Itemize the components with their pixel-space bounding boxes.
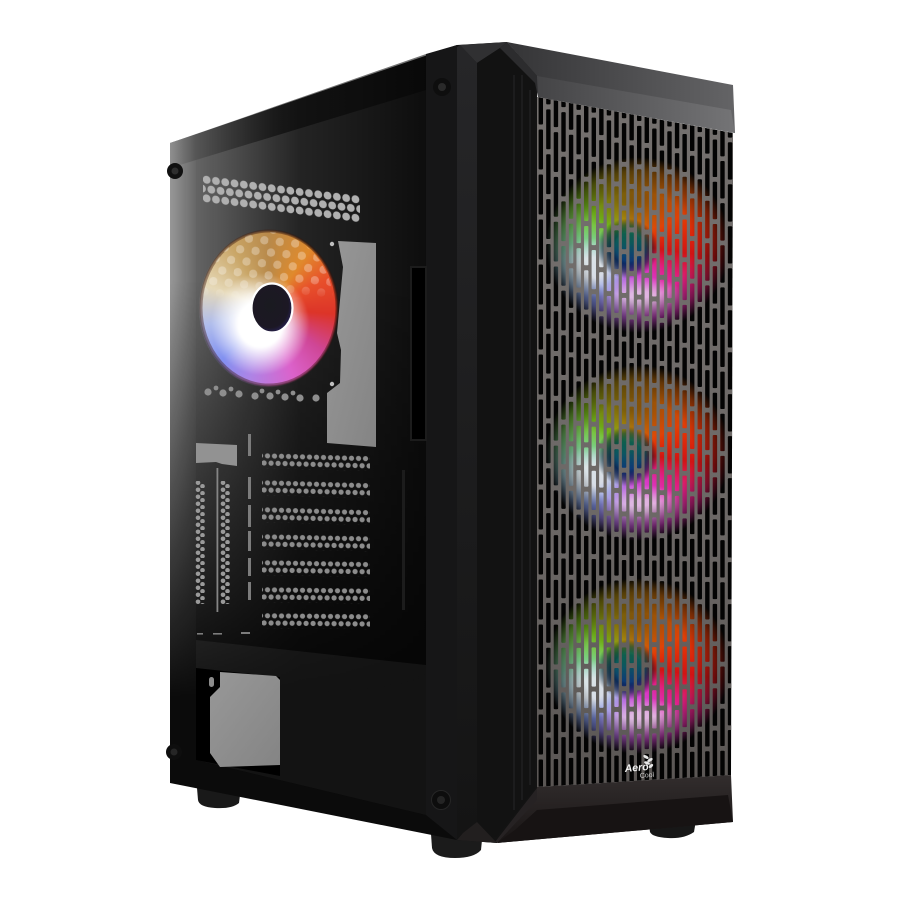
foot: rear right [649,820,696,838]
logo wordmark Cool: Cool [640,772,655,780]
perforated mesh grille [537,97,733,787]
right interior rail [402,470,405,610]
bracket holes [330,242,334,386]
expansion slot vents [262,453,370,629]
psu opening [196,668,280,776]
psu bracket plate [327,241,376,447]
glass reflection [170,78,420,674]
foot: front [431,834,482,858]
screw: top left [167,163,183,179]
front top trim [507,42,735,133]
bezel inner panel [477,48,535,838]
glass right frame [426,45,457,840]
rgb fan glow: middle [546,365,730,541]
drive bay slot [411,267,426,440]
bezel left rim [457,45,477,838]
interior: dark chassis [196,90,426,815]
rgb fan glow: top [546,157,730,333]
screw: bottom right [432,790,450,810]
brand logo [623,754,655,780]
bottom trim lower band [497,795,733,843]
rear fan lower holes [204,386,320,402]
psu screw slot [209,677,214,687]
glass top frame shade [170,54,426,168]
pc case body [166,42,735,858]
pci divider line [216,468,218,612]
bezel side rail [513,75,531,810]
fan dark rim [201,231,337,385]
vertical vent strip 1 [195,481,206,604]
top vent perforation [203,175,360,223]
rgb fan glow: bottom [546,578,730,754]
rear fan details [200,230,338,386]
psu plate [210,672,280,767]
interior: lower psu shroud [196,640,426,815]
front mesh backing [537,97,733,787]
foot: rear left [197,788,240,808]
pci dashed edge [197,434,251,635]
bezel lower highlight [495,788,538,842]
vertical vent strip 2 [220,481,231,604]
front bottom trim [497,775,733,843]
logo leaf icon [643,754,654,769]
panel: tempered glass side [170,45,457,840]
bezel top chamfer [460,42,507,63]
io plate cutout [196,443,237,466]
lower bezel chamfer [457,822,497,843]
fan hub [252,284,292,332]
fan hex grille [203,232,333,296]
rear fan rgb ring [200,231,337,386]
logo wordmark Aero: Aero [623,761,650,775]
top trim lower band [537,76,735,133]
front mesh and logo [497,97,733,843]
screw: bottom left [166,744,182,760]
front bezel [457,42,538,843]
bezel right highlight [500,42,538,97]
screw: top right [433,78,451,96]
